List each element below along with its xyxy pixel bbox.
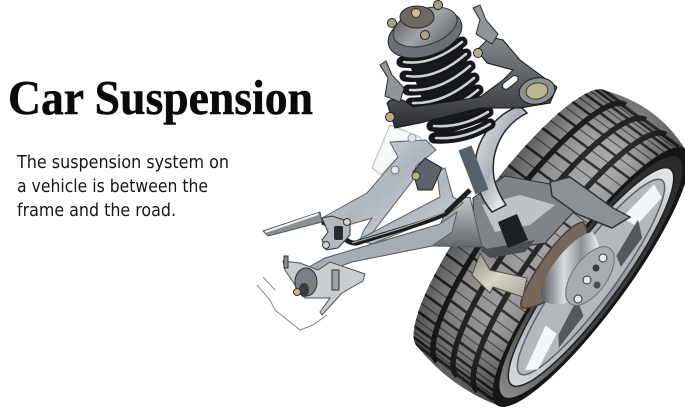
brake caliper: [550, 177, 630, 228]
strut body: [465, 148, 482, 192]
hub bell: [541, 232, 599, 304]
stud: left: [380, 61, 404, 102]
upper ball joint: [517, 75, 557, 107]
body panel outline: [257, 277, 327, 330]
lower arm strap: [300, 212, 457, 272]
tire: [414, 89, 685, 407]
stabilizer clamp: [322, 216, 350, 250]
brake disc: [521, 222, 624, 313]
ball joint: [412, 158, 442, 190]
upper mount panel: [372, 125, 430, 175]
gray panel behind arm: [433, 197, 482, 247]
stabilizer bar: [263, 190, 470, 250]
steering knuckle: [472, 253, 527, 297]
stud: right: [473, 5, 498, 44]
rear bushing assembly: [283, 256, 365, 315]
tire tread: [414, 89, 685, 407]
rear arm limb: [358, 168, 463, 244]
coil spring: [402, 40, 490, 138]
description text: frame and the road.: [17, 200, 176, 221]
description text: a vehicle is between the: [17, 176, 208, 197]
title: Car Suspension: [8, 70, 313, 125]
description text: [16, 152, 229, 221]
arm slot: [501, 74, 520, 91]
tire sidewall: [468, 128, 685, 413]
axle boot: [498, 214, 528, 248]
lower control arm: [300, 125, 463, 272]
hub face and bolts: [556, 239, 624, 313]
upper control arm: [386, 37, 557, 128]
fender shield: [475, 106, 527, 212]
wheel rim: [488, 152, 685, 402]
hub carrier: [473, 176, 580, 258]
description text: The suspension system on: [16, 152, 229, 173]
spring top mount: [382, 0, 468, 67]
illustration: car suspension and wheel: [257, 0, 685, 413]
forward arm limb: [322, 140, 436, 240]
